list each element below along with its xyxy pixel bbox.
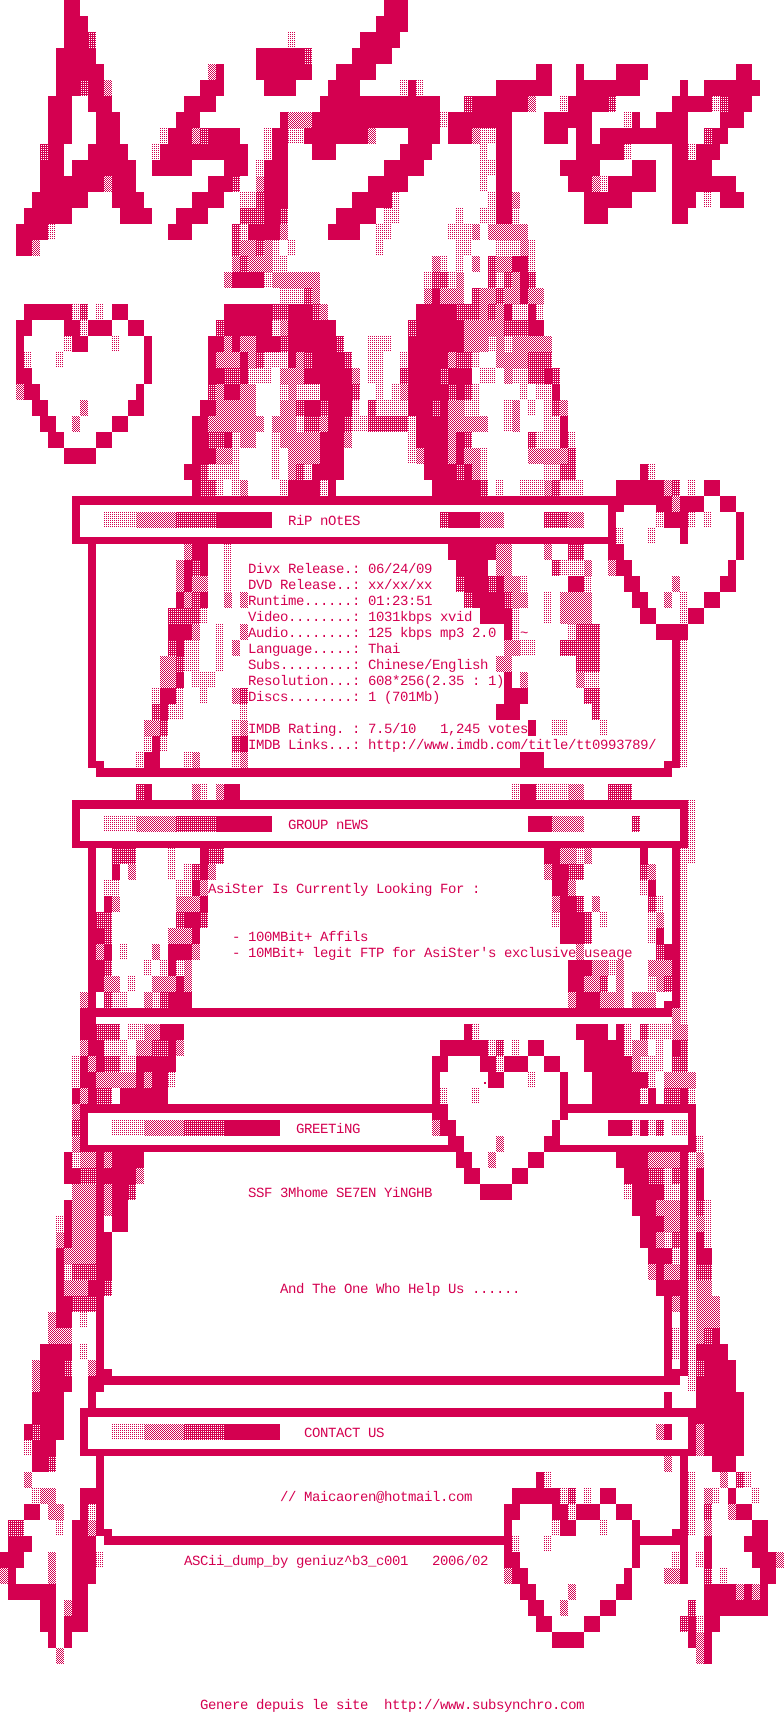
text block: release notes: Subs.........: Chinese/English [248,658,488,674]
text block: group news: - 10MBit+ legit FTP for AsiSter's exclusive useage [232,946,632,962]
panel art [112,1127,664,1129]
text block: release notes: Audio........: 125 kbps mp3 2.0 [248,626,496,642]
text block: release notes: Video........: 1031kbps xvid [248,610,472,626]
panel art [80,808,696,1016]
title: AsiSter block-art logo [16,8,760,248]
icon: heart on RiP nOtES panel [608,472,744,632]
panel frame [80,1104,696,1408]
text block: contact email: // Maicaoren@hotmail.com [280,1490,472,1506]
text block: release notes: IMDB Rating. : 7.5/10 1,245 votes [248,722,528,738]
heading: RiP nOtES: RiP nOtES [288,514,360,530]
panel: RiP nOtES [72,496,688,792]
text block: greetings: And The One Who Help Us ...... [280,1282,520,1298]
text block: group news: AsiSter Is Currently Looking For : [208,882,480,898]
heading: GROUP nEWS: GROUP nEWS [288,818,368,834]
panel frame [72,800,688,1017]
text block: release notes: Divx Release.: 06/24/09 [248,562,432,578]
text block: greetings: SSF 3Mhome SE7EN YiNGHB [248,1186,432,1202]
text block: group news [208,882,632,962]
panel: GROUP nEWS [72,800,696,1017]
panel art [112,1432,672,1464]
icon: heart bottom right [504,1480,640,1640]
text block: release notes: Runtime......: 01:23:51 [248,594,432,610]
icon: heart top left [16,312,152,456]
text block: release notes: Language.....: Thai [248,642,400,658]
icon: heart on GREETiNG panel [432,1032,568,1192]
heading: GREETiNG: GREETiNG [296,1122,360,1138]
text block: release notes: IMDB Links...: http://www.imdb.com/title/tt0993789/ [248,738,656,754]
text block: release notes: DVD Release..: xx/xx/xx [248,578,432,594]
text block: release notes: Discs........: 1 (701Mb) [248,690,440,706]
heading: CONTACT US: CONTACT US [304,1426,384,1442]
credit line: ASCii_dump_by geniuz^b3_c001 2006/02 [184,1554,488,1570]
text block: release notes: ~ [520,626,528,642]
figure: bottom block-art legs and feet [0,1480,784,1656]
panel frame [80,1408,696,1584]
panel: CONTACT US [80,1408,696,1584]
figure: right and left block-art legs [24,1208,744,1464]
text block: greetings [248,1186,520,1298]
figure: dithered block-art couple [184,264,584,488]
text block: release notes: Resolution...: 608*256(2.35 : 1) [248,674,504,690]
panel: GREETiNG [80,1104,696,1408]
panel art [104,520,688,792]
panel frame [72,496,680,777]
text block: group news: - 100MBit+ Affils [232,930,368,946]
figure: dithered block-art between news and greeting [64,1032,704,1192]
text block: release notes [248,562,656,754]
